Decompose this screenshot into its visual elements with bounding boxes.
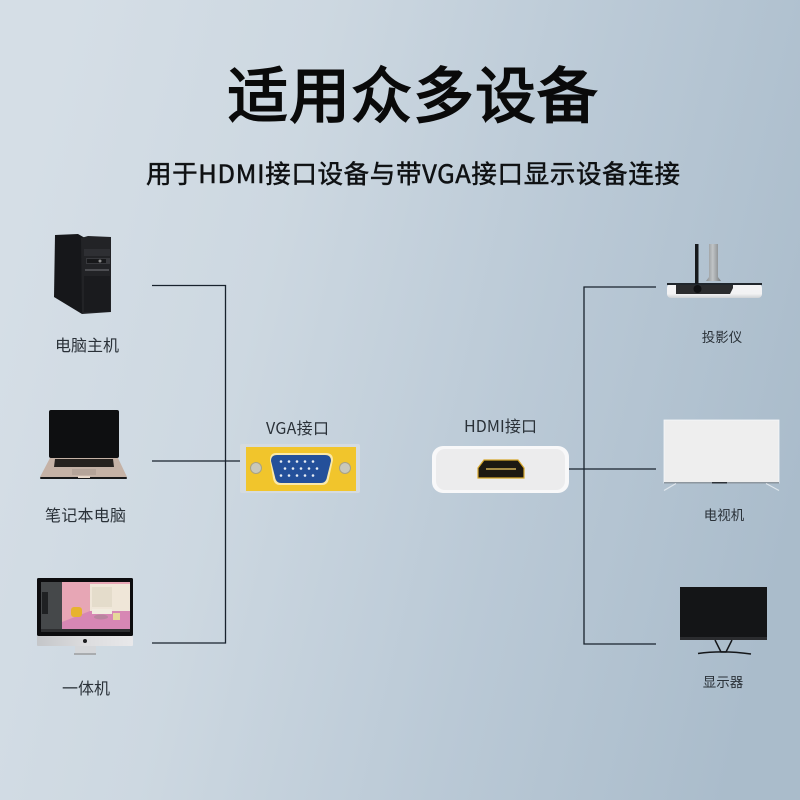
label: television: 电视机 <box>704 504 745 524</box>
icon: monitor <box>680 587 767 654</box>
title: 适用众多设备 <box>228 48 598 135</box>
icon: laptop <box>40 410 127 479</box>
label: desktop: 电脑主机 <box>55 332 119 356</box>
icon: desktop tower <box>54 234 111 314</box>
label: VGA port: VGA接口 <box>266 415 329 439</box>
icon: HDMI connector <box>432 446 569 493</box>
subtitle: 用于HDMI接口设备与带VGA接口显示设备连接 <box>146 154 680 191</box>
connector: right bracket <box>568 287 656 644</box>
label: projector: 投影仪 <box>702 326 743 346</box>
label: laptop: 笔记本电脑 <box>45 502 126 526</box>
icon: VGA connector <box>240 444 360 493</box>
connector: left bracket <box>152 286 240 643</box>
icon: television <box>664 420 779 490</box>
icon: projector <box>667 244 762 298</box>
label: all-in-one: 一体机 <box>62 675 110 699</box>
label: HDMI port: HDMI接口 <box>464 413 537 437</box>
icon: all-in-one computer <box>37 578 133 655</box>
label: monitor: 显示器 <box>703 671 744 691</box>
